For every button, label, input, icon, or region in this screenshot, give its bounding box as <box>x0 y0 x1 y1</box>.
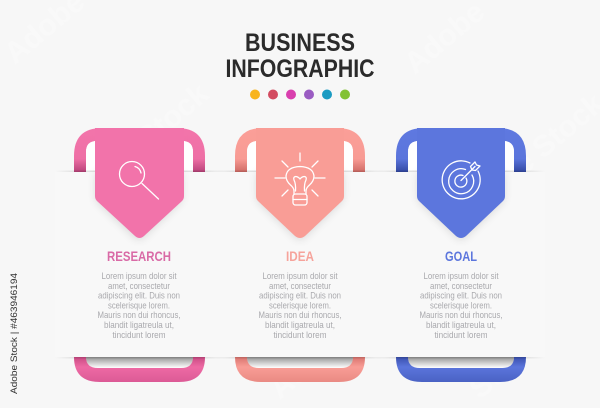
title: BUSINESS <box>245 29 355 57</box>
title <box>226 29 374 83</box>
watermark: Adobe Stock <box>53 77 215 220</box>
watermark: Stock <box>463 327 547 405</box>
title: INFOGRAPHIC <box>226 55 374 83</box>
text block: research: blandit ligatreula ut, <box>104 320 174 331</box>
card: goal <box>375 170 545 358</box>
card: idea <box>215 170 385 358</box>
top frame: idea <box>235 128 365 172</box>
text block: goal: Lorem ipsum dolor sit <box>424 271 499 282</box>
text block: goal: tincidunt lorem <box>434 330 488 341</box>
panel: goal <box>375 128 545 382</box>
watermark: Adobe Stock <box>263 262 425 405</box>
colored dots <box>250 90 350 100</box>
bookmark: research <box>95 128 184 240</box>
text block: idea: Lorem ipsum dolor sit <box>262 271 338 282</box>
bottom frame: goal <box>396 357 526 382</box>
text block: goal: amet, consectetur <box>430 281 492 292</box>
heading: goal: GOAL <box>445 248 477 264</box>
text block: goal <box>420 271 502 341</box>
bookmark: idea <box>256 128 344 240</box>
text block: research: amet, consectetur <box>108 281 170 292</box>
text block: research: scelerisque lorem. <box>108 300 170 312</box>
text block: idea <box>258 271 342 341</box>
text block: research: Lorem ipsum dolor sit <box>102 271 177 282</box>
text block: idea: adipiscing elit. Duis non <box>259 290 341 302</box>
text block: idea: scelerisque lorem. <box>269 300 331 312</box>
card: research <box>55 170 225 358</box>
text block: research: adipiscing elit. Duis non <box>98 290 180 302</box>
icon: magnifying glass <box>120 162 158 199</box>
top frame: goal <box>396 128 526 172</box>
text block: research: tincidunt lorem <box>112 330 166 341</box>
panel: research <box>55 128 225 382</box>
text block: idea: amet, consectetur <box>269 281 331 292</box>
text block: idea: tincidunt lorem <box>274 330 327 341</box>
text block: goal: Mauris non dui rhoncus, <box>420 310 502 321</box>
bottom frame: idea <box>235 357 365 382</box>
bottom frame: research <box>74 357 205 382</box>
text block: research <box>98 271 180 341</box>
text block: goal: scelerisque lorem. <box>430 300 492 312</box>
panel: idea <box>215 128 385 382</box>
watermark: Adobe Stock <box>208 127 370 270</box>
bookmark: goal <box>417 128 505 240</box>
heading: idea: IDEA <box>286 248 314 264</box>
icon: target <box>442 161 480 199</box>
top frame: research <box>74 128 205 172</box>
text block: idea: Mauris non dui rhoncus, <box>258 310 342 321</box>
icon: light bulb <box>275 153 325 205</box>
side stock credit: Adobe Stock | #463946194 <box>9 273 20 394</box>
text block: idea: blandit ligatreula ut, <box>265 320 335 331</box>
heading: research: RESEARCH <box>107 248 171 264</box>
text block: goal: adipiscing elit. Duis non <box>420 290 502 302</box>
text block: goal: blandit ligatreula ut, <box>426 320 496 331</box>
text block: research: Mauris non dui rhoncus, <box>98 310 180 321</box>
